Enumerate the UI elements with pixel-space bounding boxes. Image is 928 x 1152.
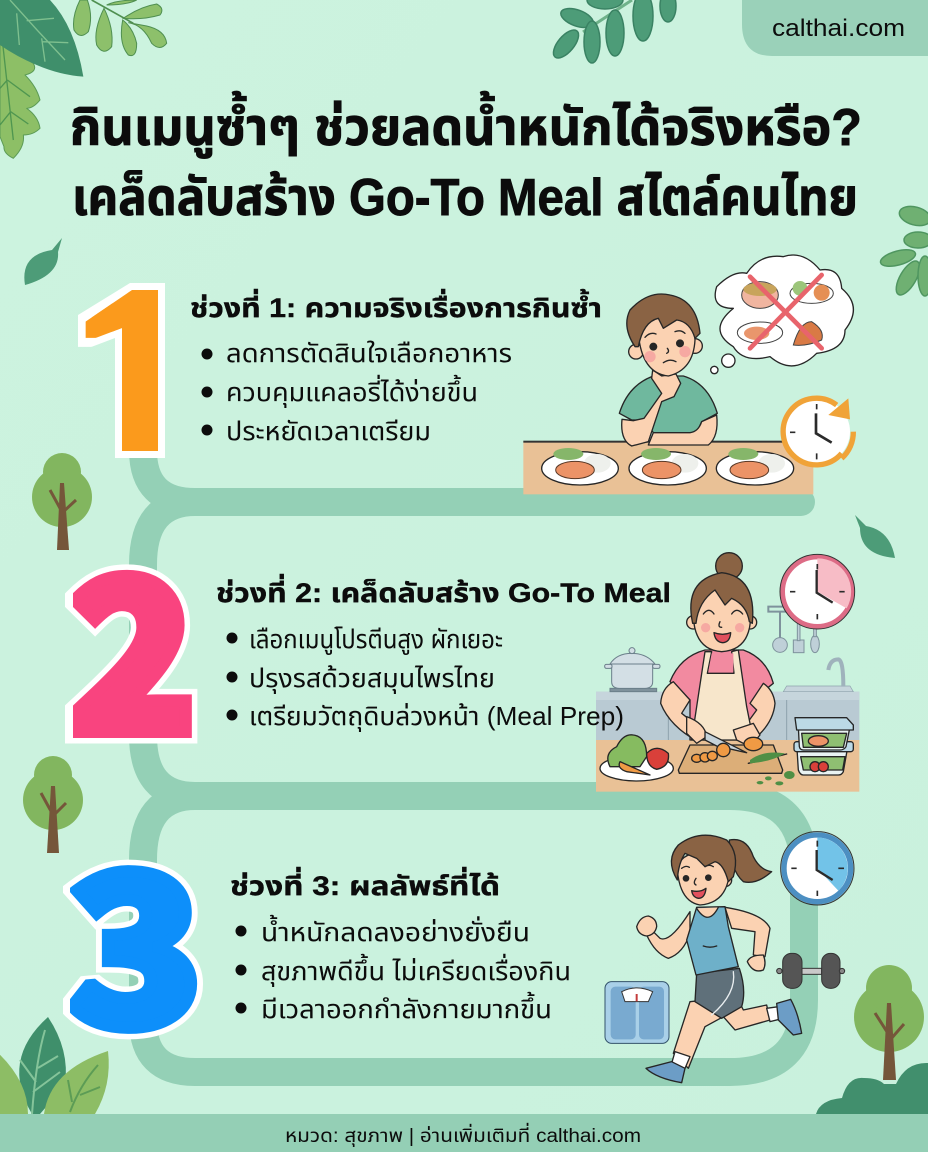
site tab [742,0,928,56]
man [619,294,717,446]
salad plate [600,735,673,781]
number 3 [63,860,203,1040]
title [70,91,862,227]
hanging utensils [768,607,819,653]
number 1 [78,283,165,458]
number 2 [65,564,198,744]
bathroom scale [605,982,669,1043]
site name: calthai.com [772,15,905,42]
section 2 text: เลือกเมนูโปรตีนสูง ผักเยอะ [249,624,503,655]
section 2 text [216,574,671,732]
leaves: top centre sprig [549,0,676,63]
section 3 text: ช่วงที่ 3: ผลลัพธ์ที่ได้ [230,867,500,901]
number 1: 1 [71,204,201,508]
meal prep containers [794,718,853,775]
footer text: หมวด: สุขภาพ | อ่านเพิ่มเติมที่ calthai.com [285,1122,641,1147]
illustration 1: thinking man at table [523,255,853,494]
leaves: top light sprig [73,0,167,56]
kitchen units [596,659,859,742]
plates [542,448,794,485]
title: เคล็ดลับสร้าง Go-To Meal สไตล์คนไทย [72,169,858,227]
title: กินเมนูซ้ำๆ ช่วยลดน้ำหนักได้จริงหรือ? [70,91,862,159]
number 1: 1 [71,204,201,508]
section 1 text: ควบคุมแคลอรี่ได้ง่ายขึ้น [226,374,478,408]
tree left upper [32,453,92,550]
wall clock [780,554,855,629]
section 2 text: เตรียมวัตถุดิบล่วงหน้า (Meal Prep) [249,701,624,732]
section 1 text: ลดการตัดสินใจเลือกอาหาร [226,338,512,368]
section 1 text: ช่วงที่ 1: ความจริงเรื่องการกินซ้ำ [190,289,602,323]
illustration 2: woman cooking in kitchen [596,553,859,792]
thought bubble [711,255,853,374]
runner [637,835,802,1083]
herb pieces [750,752,795,785]
leaves: bottom left [0,1017,109,1114]
cutting board and knife [678,732,787,773]
number 2: 2 [68,487,197,793]
dumbbell [777,953,845,988]
small leaf right [855,515,895,558]
leaves: right sprig [879,203,928,298]
pot [605,648,660,692]
clock with arrow [783,398,853,465]
tree left lower [23,756,83,853]
number 2: 2 [68,487,197,793]
bush [816,1063,928,1114]
section 1 text: ประหยัดเวลาเตรียม [226,416,431,446]
leaves: top left [0,0,83,158]
tree right [854,965,924,1080]
number 3: 3 [67,784,203,1085]
section 3 text: น้ำหนักลดลงอย่างยั่งยืน [261,914,530,947]
footer band [0,1114,928,1152]
section 2 text: ช่วงที่ 2: เคล็ดลับสร้าง Go-To Meal [216,574,671,608]
section 3 text [230,867,571,1024]
illustration 3: running woman [605,832,854,1083]
section 1 text [190,289,602,446]
section 2 text: ปรุงรสด้วยสมุนไพรไทย [249,663,495,694]
small leaf left [24,238,62,285]
woman [661,553,775,747]
number 3: 3 [67,784,203,1085]
section 3 text: มีเวลาออกกำลังกายมากขึ้น [261,991,552,1024]
section 3 text: สุขภาพดีขึ้น ไม่เครียดเรื่องกิน [261,953,571,987]
counter [596,740,859,792]
clock [781,832,854,905]
table [523,441,813,494]
winding path connecting the steps [143,450,804,1072]
